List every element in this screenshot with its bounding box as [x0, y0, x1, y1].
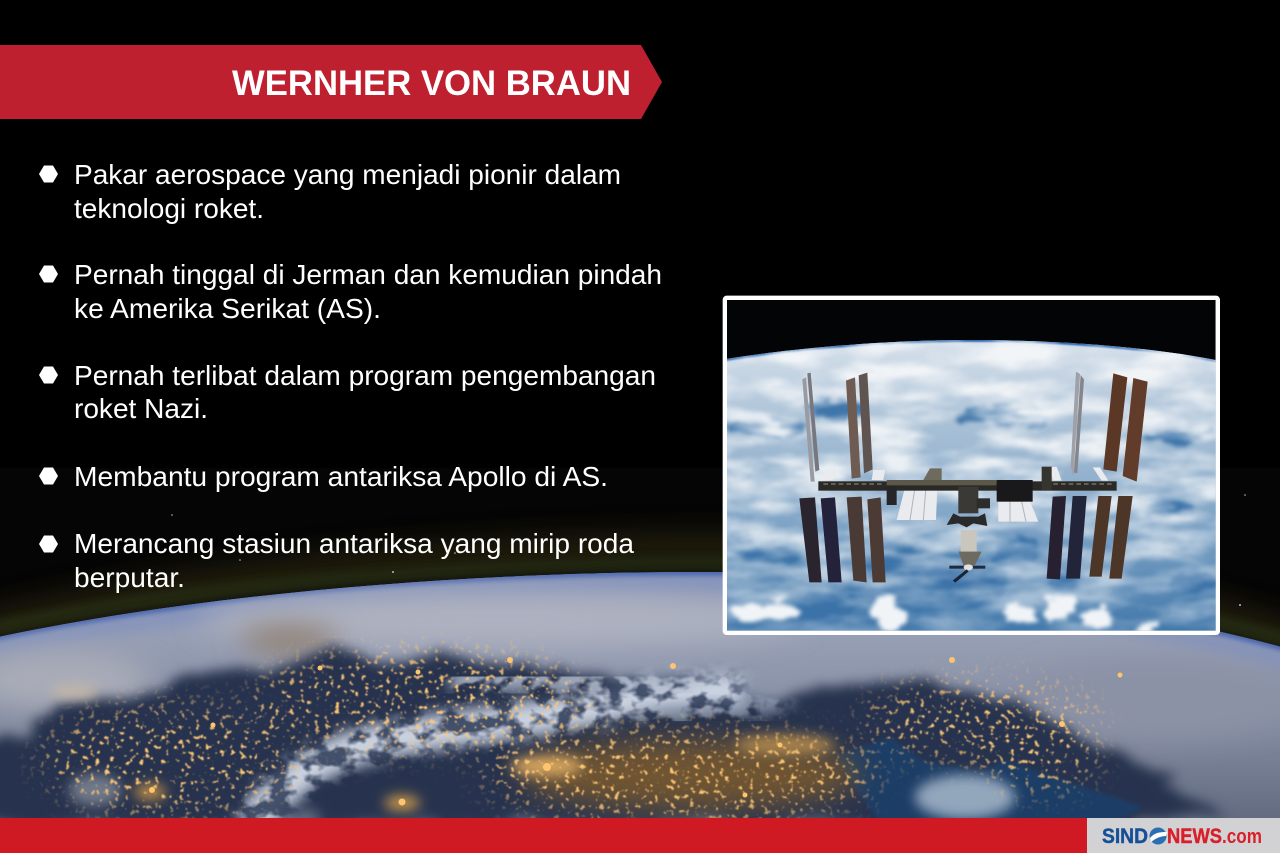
speckled lights: [40, 650, 1100, 823]
dark land mass: [0, 655, 1224, 825]
solar arrays, lower: [799, 496, 1133, 582]
logo: SINDONEWS.com: NEWS: [1167, 825, 1222, 848]
bullet 2: [39, 259, 662, 324]
bullet 5: [39, 528, 634, 593]
bullet 5: Merancang stasiun antariksa yang mirip roda: [74, 528, 634, 559]
logo: SINDONEWS.com: SIND: [1102, 825, 1148, 848]
solar arrays, upper: [802, 372, 1148, 482]
bullet 4: Membantu program antariksa Apollo di AS.: [74, 461, 608, 492]
icon: logo globe: [1150, 828, 1167, 844]
truss and central modules: [818, 467, 1117, 583]
logo: SINDONEWS.com: [1087, 818, 1280, 853]
bullet 2: ke Amerika Serikat (AS).: [74, 293, 381, 324]
bullet 3: Pernah terlibat dalam program pengembangan: [74, 360, 656, 391]
radiators: [820, 467, 1108, 522]
bullet 3: [39, 360, 656, 424]
city glow: [520, 741, 860, 809]
bullet 2: Pernah tinggal di Jerman dan kemudian pindah: [74, 259, 662, 290]
cloud texture: [720, 337, 1223, 637]
bullet 5: berputar.: [74, 562, 185, 593]
city lights: [149, 657, 1122, 806]
logo: SINDONEWS.com: .com: [1222, 826, 1262, 848]
bullet 3: roket Nazi.: [74, 393, 208, 424]
bottom red bar: [0, 818, 1088, 853]
stars: [171, 494, 1246, 606]
bullet 1: Pakar aerospace yang menjadi pionir dalam: [74, 159, 621, 190]
lake and sea: [836, 738, 1140, 818]
blue ocean patches: [725, 402, 1217, 630]
bullet 1: [39, 159, 621, 224]
snowy alps: [250, 680, 790, 825]
bullet 1: teknologi roket.: [74, 193, 264, 224]
photo: International Space Station over Earth: [720, 296, 1223, 637]
title: WERNHER VON BRAUN: [232, 64, 631, 103]
background: earth at night from space: [0, 494, 1280, 818]
title ribbon: [0, 45, 662, 119]
white cumulus clouds: [733, 593, 1158, 632]
